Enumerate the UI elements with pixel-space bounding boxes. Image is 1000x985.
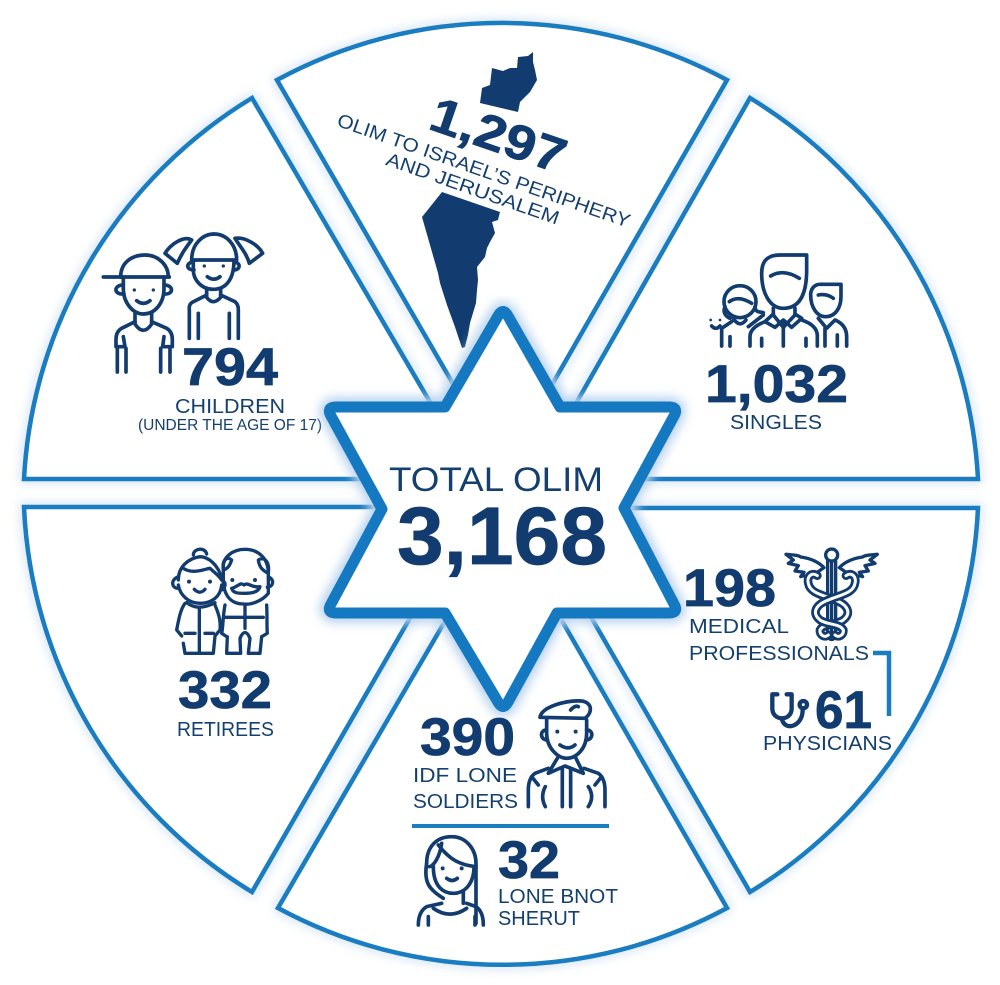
statistic: 32 lone bnot sherut: LONE BNOT	[498, 886, 618, 908]
icon: map of Israel	[422, 52, 537, 348]
icon: soldier	[528, 701, 605, 807]
statistic: 1,297 olim to periphery: AND JERUSALEM	[383, 149, 562, 229]
statistic: 61 physicians	[763, 681, 892, 755]
statistic: 794 children: (UNDER THE AGE OF 17)	[138, 417, 322, 434]
statistic: 32 lone bnot sherut: SHERUT	[498, 908, 580, 930]
statistic: 61 physicians: PHYSICIANS	[763, 733, 892, 755]
star glow	[329, 312, 676, 706]
panel: singles segment	[533, 98, 978, 479]
statistic: 198 medical professionals: PROFESSIONALS	[689, 643, 869, 665]
icon: caduceus	[786, 549, 877, 639]
title: total olim: 3,168	[397, 491, 607, 582]
icon: children	[103, 234, 263, 372]
statistic: 1,032 singles: 1,032	[705, 355, 848, 414]
statistic: 198 medical professionals: 198	[683, 559, 776, 618]
panel: lone soldiers segment	[278, 520, 727, 965]
statistic: 32 lone bnot sherut: 32	[498, 831, 560, 890]
statistic: 1,032 singles: SINGLES	[730, 412, 822, 434]
statistic: 332 retirees: RETIREES	[177, 719, 274, 741]
panel: medical professionals segment	[528, 508, 978, 892]
statistic: 1,297 olim to periphery: 1,297	[423, 88, 573, 184]
icon: singles group	[709, 255, 847, 346]
statistic: 390 IDF lone soldiers	[413, 708, 518, 813]
statistic: 332 retirees: 332	[178, 661, 272, 720]
icon: stethoscope	[772, 694, 807, 726]
panel: periphery and Jerusalem segment	[277, 23, 727, 470]
statistic: 794 children: CHILDREN	[175, 396, 285, 418]
star of David	[329, 312, 676, 706]
icon: young woman	[418, 837, 483, 925]
title: total olim: TOTAL OLIM	[389, 461, 603, 499]
statistic: 794 children: 794	[182, 338, 279, 397]
statistic: 61 physicians: 61	[815, 681, 872, 740]
statistic: 1,032 singles	[705, 355, 848, 434]
statistic: 390 IDF lone soldiers: SOLDIERS	[413, 791, 518, 813]
panel: children segment	[24, 98, 475, 479]
statistic: 390 IDF lone soldiers: IDF LONE	[413, 765, 517, 787]
icon: retirees couple	[173, 549, 273, 653]
statistic: 32 lone bnot sherut	[498, 831, 618, 930]
statistic: 390 IDF lone soldiers: 390	[420, 708, 515, 767]
bracket: physicians subset of medical	[873, 653, 889, 716]
statistic: 198 medical professionals	[683, 559, 869, 665]
statistic: 1,297 olim to periphery: OLIM TO ISRAEL’S PERIPHERY	[334, 110, 633, 233]
statistic: 198 medical professionals: MEDICAL	[689, 616, 789, 638]
statistic: 332 retirees	[177, 661, 274, 741]
divider: soldiers and bnot sherut	[412, 824, 609, 828]
statistic: 794 children	[138, 338, 322, 434]
panel: retirees segment	[24, 507, 474, 892]
